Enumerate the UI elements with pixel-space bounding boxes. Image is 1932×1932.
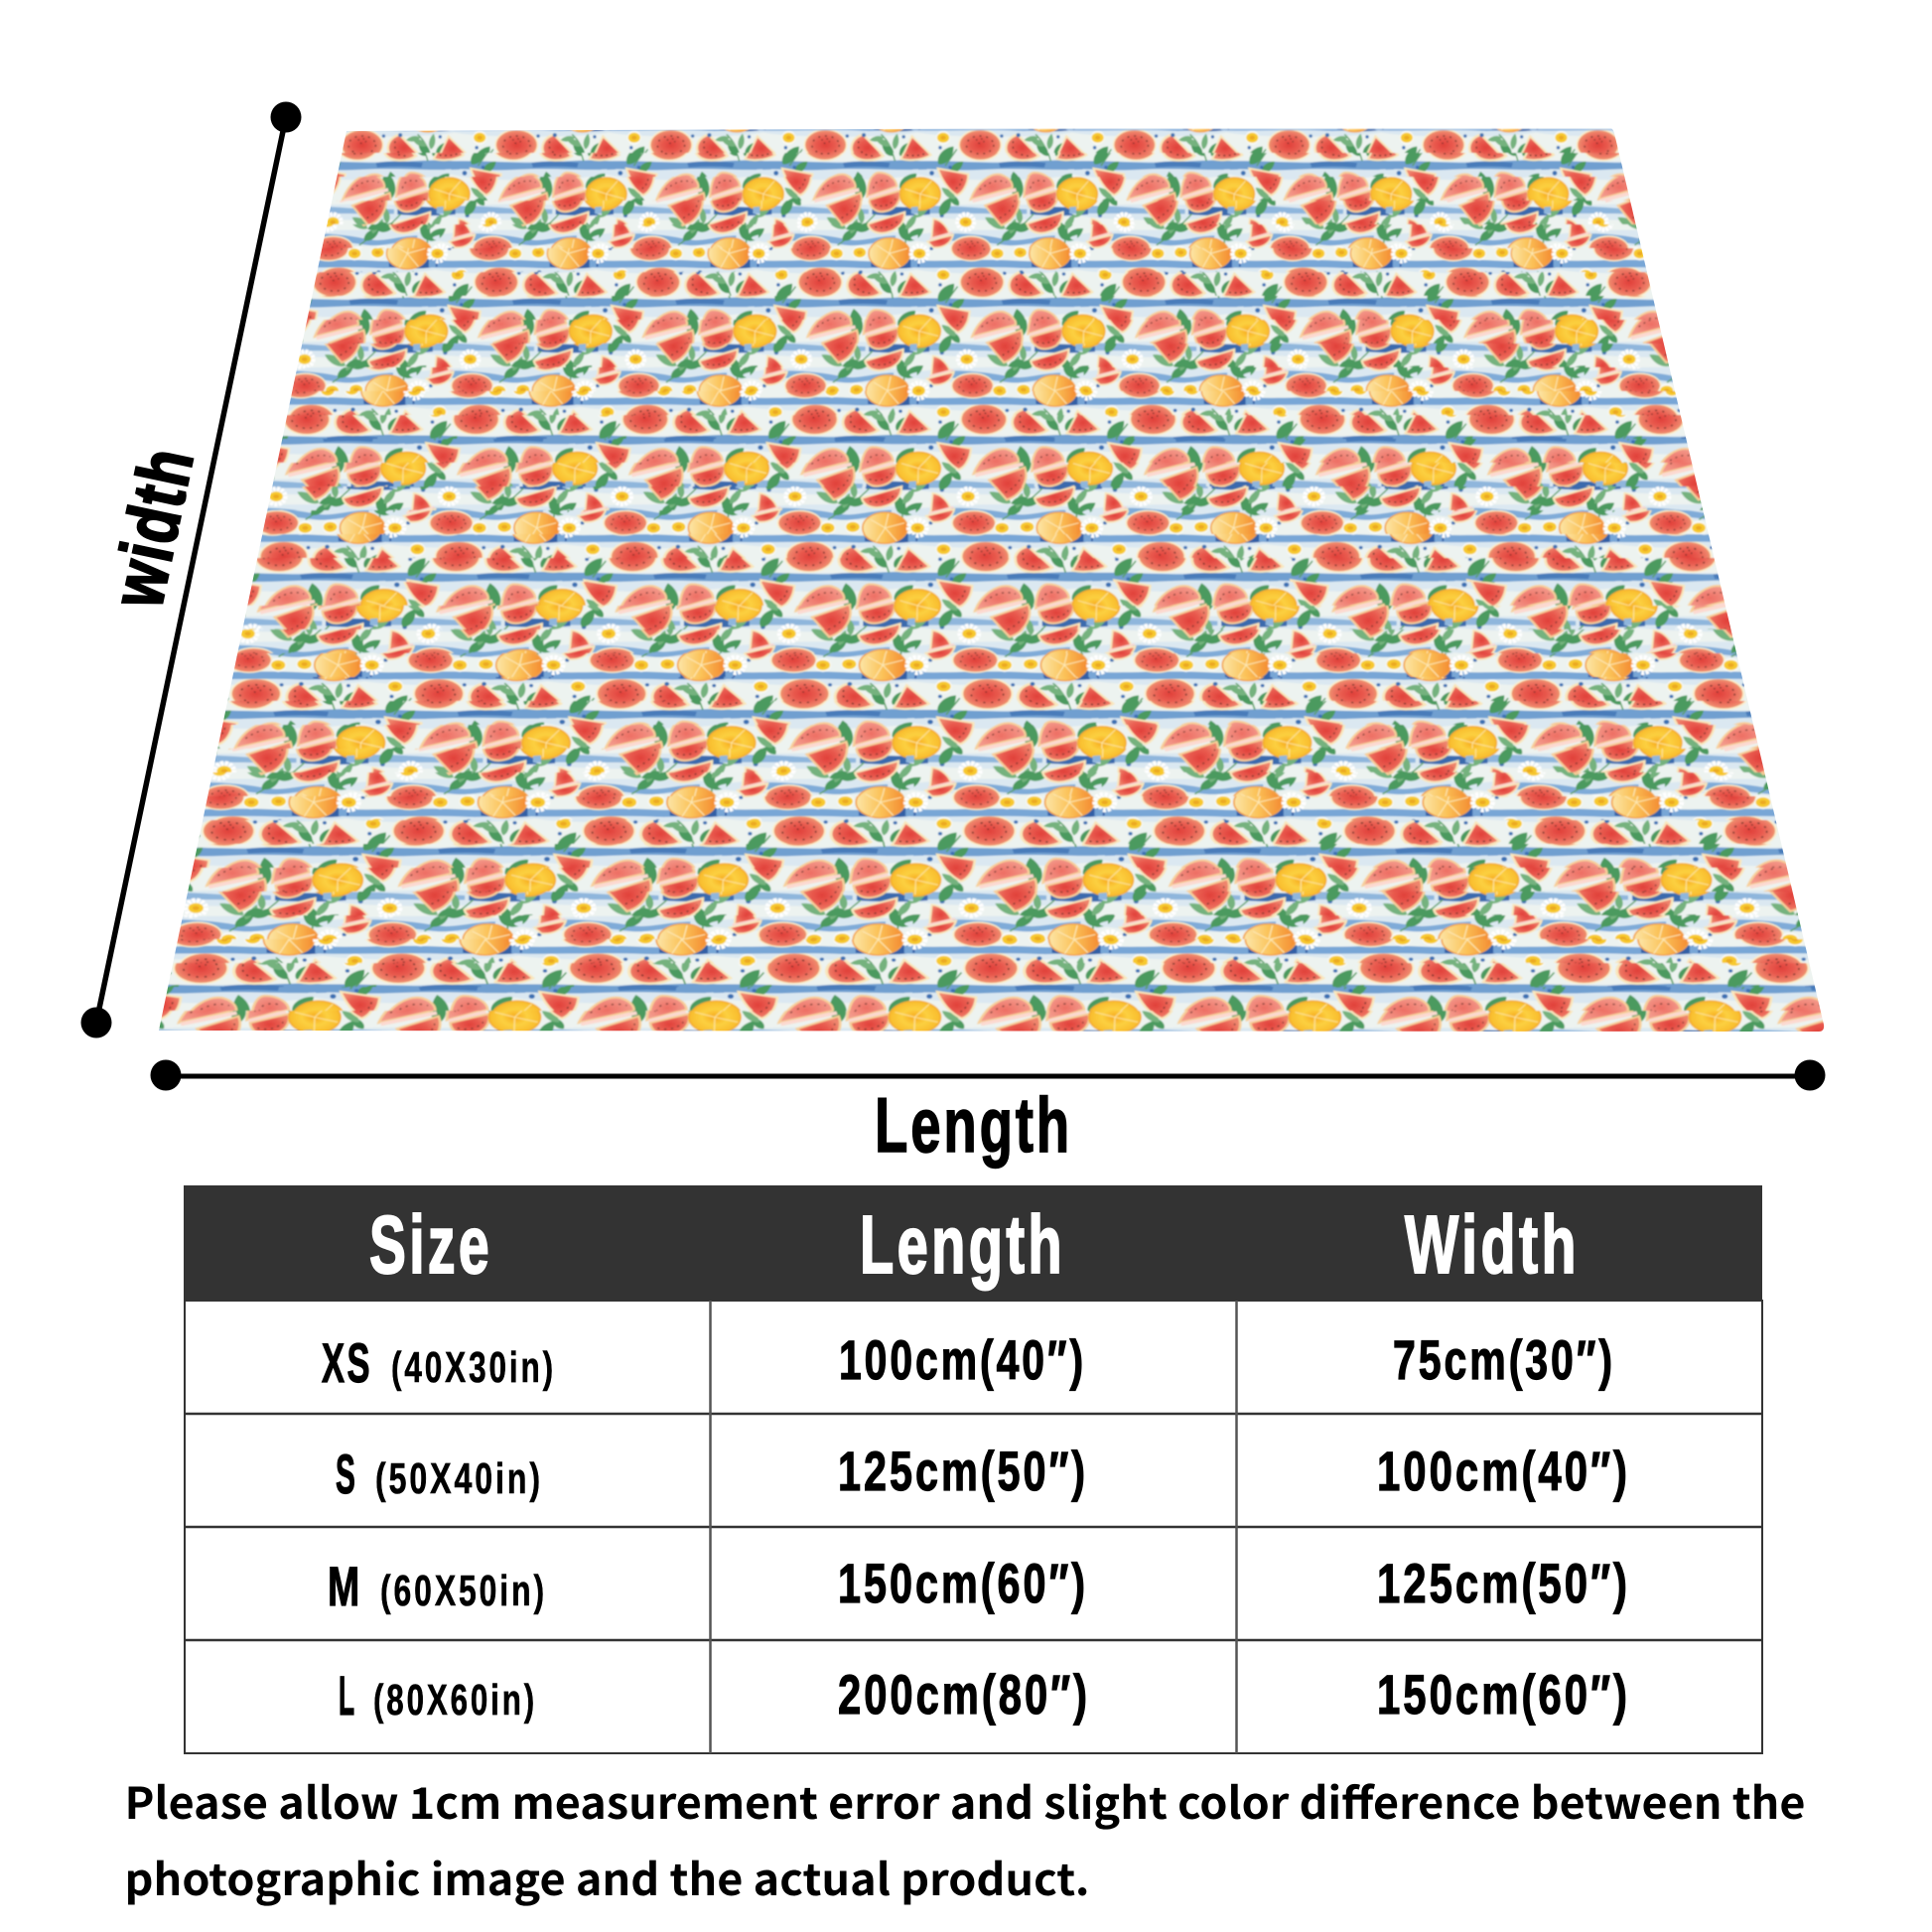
row XS: 75cm(30″) [1393, 1328, 1615, 1391]
table header [184, 1185, 1762, 1301]
label: width: width [95, 439, 209, 615]
note text: photographic image and the actual product. [125, 1845, 1090, 1908]
row L: L [339, 1664, 356, 1726]
row XS: 100cm(40″) [839, 1328, 1086, 1391]
row M: (60X50in) [380, 1567, 547, 1615]
table header: Width [1405, 1198, 1580, 1291]
row S: (50X40in) [375, 1454, 543, 1503]
table header: Size [369, 1198, 492, 1291]
row XS [322, 1328, 1615, 1394]
row S: 100cm(40″) [1377, 1440, 1630, 1502]
row L [339, 1663, 1630, 1726]
row S: S [336, 1443, 357, 1505]
label: Length: Length [875, 1081, 1072, 1169]
row M [328, 1552, 1630, 1617]
row M: 150cm(60″) [838, 1552, 1088, 1614]
row S [336, 1440, 1630, 1505]
row XS: XS [322, 1331, 372, 1394]
table: size chart [184, 1185, 1762, 1753]
panel: blanket with fruit pattern [88, 129, 1895, 1035]
table header: Length [860, 1198, 1065, 1291]
table grid [185, 1301, 1762, 1753]
row M: M [328, 1555, 362, 1617]
note text: Please allow 1cm measurement error and slight color difference between the [125, 1768, 1805, 1832]
row L: 200cm(80″) [838, 1663, 1090, 1725]
arrow: width dimension line [81, 101, 302, 1038]
row XS: (40X30in) [391, 1343, 556, 1392]
row L: 150cm(60″) [1377, 1663, 1630, 1725]
row L: (80X60in) [373, 1676, 537, 1725]
note text [125, 1768, 1805, 1908]
arrow: length dimension line [151, 1060, 1825, 1090]
row M: 125cm(50″) [1377, 1552, 1630, 1614]
row S: 125cm(50″) [838, 1440, 1088, 1502]
